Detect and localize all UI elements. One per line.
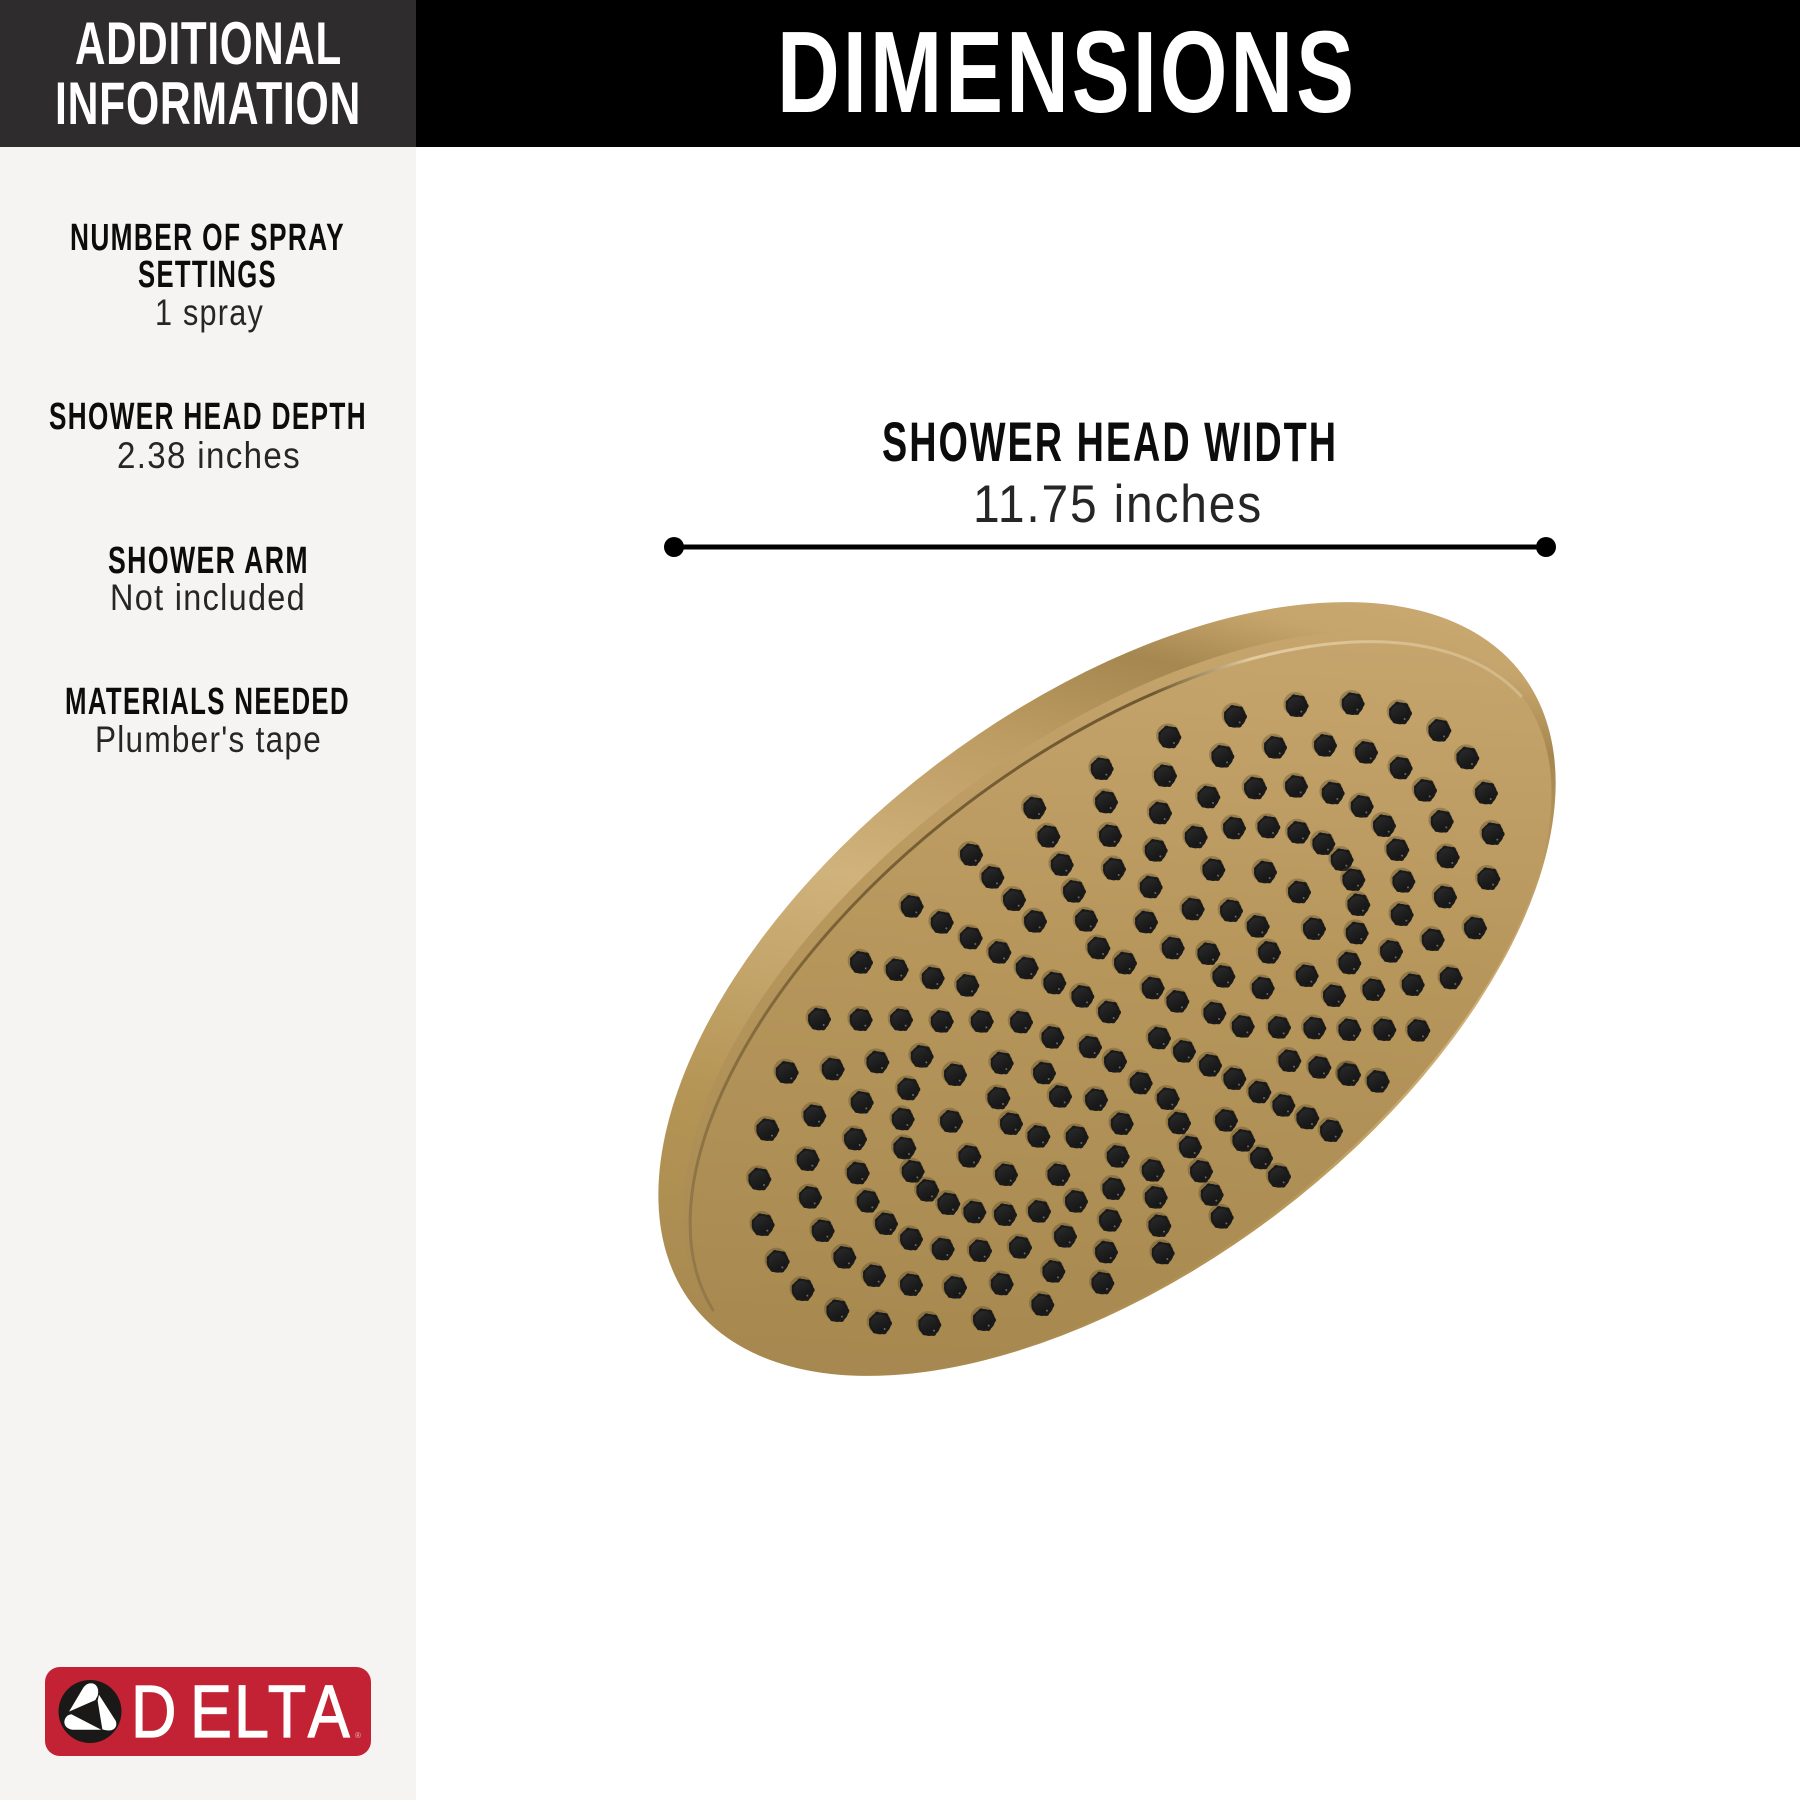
rim edge line <box>690 642 1521 1310</box>
rim: outer silhouette <box>522 449 1692 1529</box>
face plate <box>554 487 1680 1519</box>
panel: additional information sidebar <box>0 0 416 1800</box>
logo: Delta <box>45 1667 371 1756</box>
label: shower head width: 11.75 inches <box>973 475 1263 534</box>
label: shower head width <box>882 410 1338 534</box>
info: shower head depth: SHOWER HEAD DEPTH <box>49 396 367 438</box>
nozzles: lower left <box>746 1061 1077 1336</box>
info: materials needed: MATERIALS NEEDED <box>65 681 350 723</box>
heading: additional information <box>0 0 416 147</box>
info: number of spray settings: NUMBER OF SPRAY <box>70 217 345 259</box>
info: number of spray settings: 1 spray <box>155 292 264 333</box>
logo: Delta: DELTA <box>131 1670 350 1753</box>
info: shower head depth <box>49 396 367 476</box>
info: materials needed: Plumber's tape <box>95 719 322 760</box>
info: shower arm: SHOWER ARM <box>108 540 309 582</box>
nozzles: lower right <box>1063 1061 1390 1294</box>
title bar: dimensions <box>416 0 1800 147</box>
info: shower arm <box>108 540 309 618</box>
label: shower head width: SHOWER HEAD WIDTH <box>882 410 1338 473</box>
logo: Delta: ® <box>355 1731 361 1740</box>
info: shower arm: Not included <box>110 577 306 618</box>
nozzles: upper right <box>1048 690 1505 1085</box>
heading: additional information: ADDITIONAL <box>75 10 342 77</box>
title bar: dimensions: DIMENSIONS <box>777 7 1357 137</box>
info: number of spray settings: SETTINGS <box>138 254 277 296</box>
info: shower head depth: 2.38 inches <box>117 435 301 476</box>
info: number of spray settings <box>70 217 345 333</box>
product: round rain shower head <box>522 449 1692 1529</box>
nozzles: upper left <box>773 794 1066 1084</box>
dimension line: width <box>664 537 1556 557</box>
info: materials needed <box>65 681 350 760</box>
heading: additional information: INFORMATION <box>55 70 361 137</box>
